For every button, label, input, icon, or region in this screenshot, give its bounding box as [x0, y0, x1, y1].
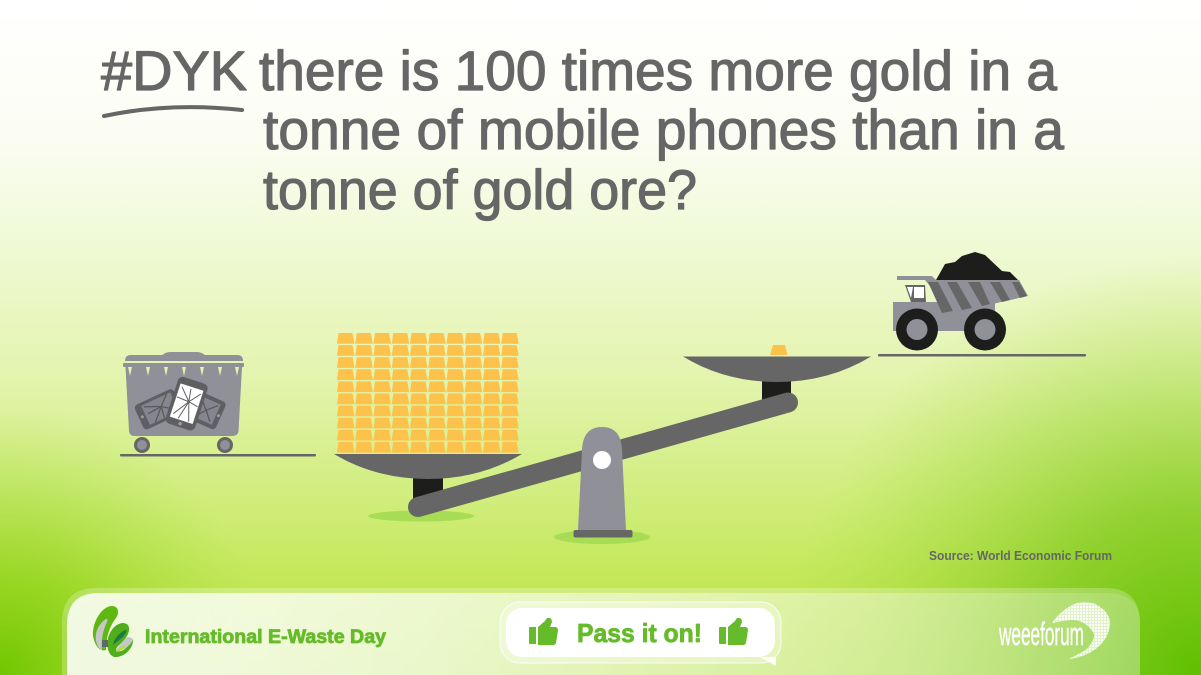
icon: waste bin with broken phones	[120, 352, 316, 456]
scale shadows	[368, 510, 650, 544]
fulcrum foot	[574, 530, 632, 538]
text: Pass it on!: Pass it on!	[577, 618, 702, 648]
balance scale	[334, 345, 871, 544]
icon: stacked gold bars	[337, 333, 519, 453]
icon: mining truck with ore	[878, 252, 1086, 356]
beam	[418, 402, 788, 507]
source credit: Source: World Economic Forum	[929, 548, 1112, 563]
small gold bar	[770, 345, 788, 355]
right pan post	[762, 381, 791, 405]
icon: thumbs up left	[529, 618, 558, 645]
left pan post	[413, 478, 443, 508]
logo: weeeforum: weeeforum	[998, 616, 1084, 652]
left pan	[334, 454, 522, 479]
fulcrum pivot	[593, 451, 611, 469]
logo: weeeforum	[998, 602, 1110, 659]
title line 1: there is 100 times more gold in a	[259, 39, 1058, 102]
title	[101, 39, 1065, 221]
fulcrum	[578, 427, 626, 530]
footer panel	[62, 588, 1140, 675]
title line 2: tonne of mobile phones than in a	[263, 98, 1065, 161]
icon: thumbs up right	[719, 618, 748, 645]
hashtag DYK with underline: #DYK	[101, 39, 247, 102]
label: International E-Waste Day: International E-Waste Day	[145, 627, 386, 648]
title line 3: tonne of gold ore?	[263, 158, 697, 221]
right pan	[683, 356, 871, 382]
icon: International E-Waste Day logo	[93, 606, 133, 657]
speech bubble: Pass it on	[500, 602, 781, 666]
